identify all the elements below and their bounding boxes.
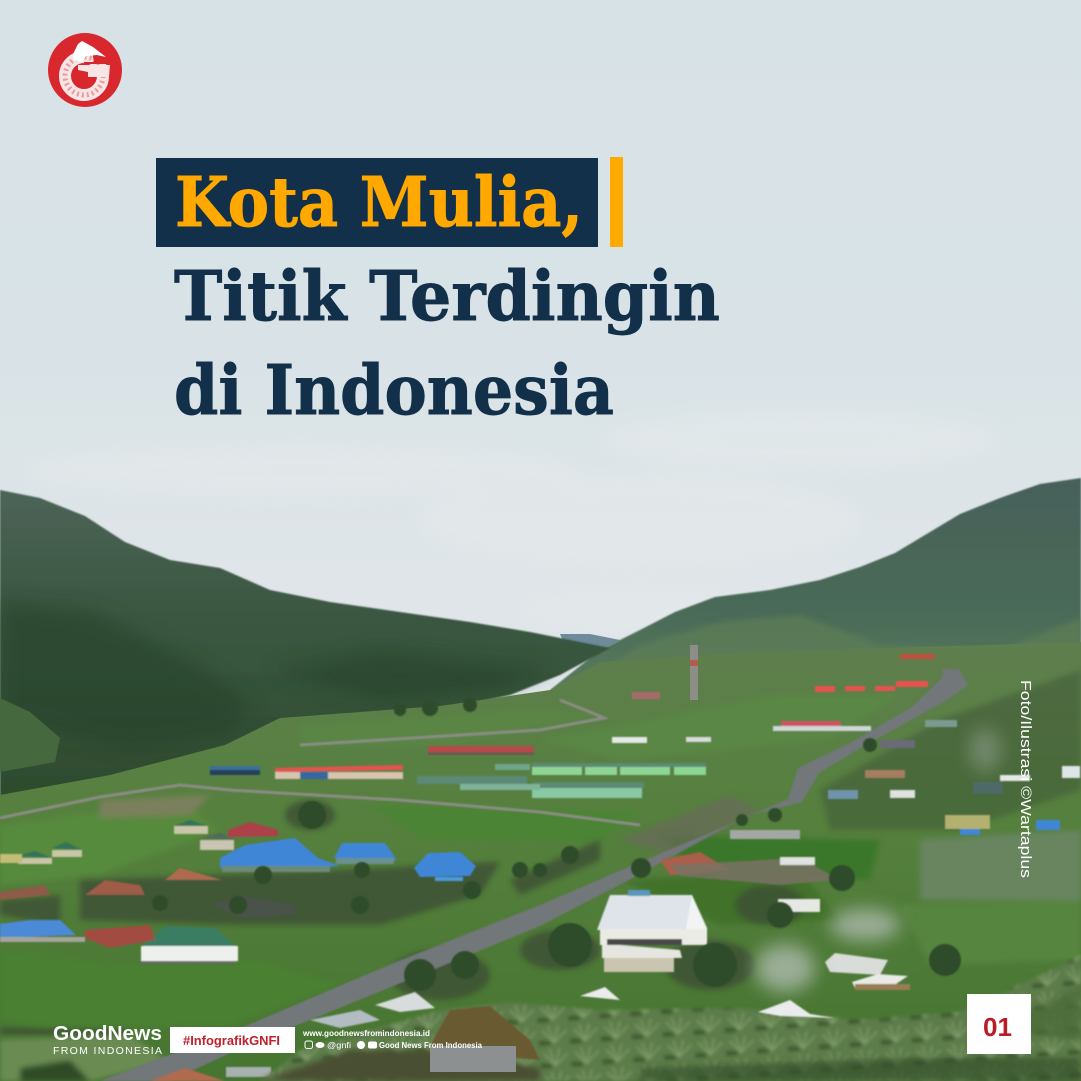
mountain shading: [0, 600, 550, 750]
white roof among shrubs: [758, 1000, 835, 1018]
icon: twitter: [316, 1042, 324, 1048]
side roads: [0, 700, 640, 825]
trees: [152, 698, 961, 991]
page number badge: [967, 994, 1031, 1054]
blue roofs: [220, 838, 340, 868]
haystack hut and fence: [430, 1006, 540, 1072]
logo: GNFI garuda emblem: [48, 33, 122, 107]
mountain: left: [0, 490, 610, 810]
hashtag badge: #InfografikGNFI: [183, 1033, 280, 1048]
title: [156, 157, 720, 431]
brown and red roofs: [228, 822, 278, 837]
church: [597, 895, 703, 930]
icon: facebook: [357, 1041, 365, 1049]
valley ground: [0, 642, 1081, 1081]
title accent bar: [610, 157, 623, 247]
green roof building: [141, 926, 238, 948]
footer: GoodNews brand: FROM INDONESIA: [53, 1045, 162, 1057]
social links: Good News From Indonesia: [379, 1041, 483, 1050]
main road: [100, 669, 968, 1081]
photo credit: Foto/Ilustrasi ©Wartaplus: [1017, 680, 1033, 878]
title line 1: Kota Mulia,: [175, 163, 583, 243]
social links: [302, 1029, 483, 1050]
clouds: [20, 410, 1000, 630]
page number badge: 01: [983, 1012, 1012, 1042]
foreground shrubs: [260, 955, 1081, 1081]
title highlight box: [156, 158, 598, 247]
radio tower: [690, 645, 698, 700]
icon: youtube: [368, 1042, 377, 1048]
red roofs: [275, 765, 403, 772]
town: dark vegetation and yards: [0, 670, 1081, 1000]
title line 3: di Indonesia: [174, 351, 614, 431]
sky: [0, 0, 1081, 720]
green houses: [495, 764, 706, 798]
smoke: [755, 728, 1001, 992]
footer: GoodNews brand: GoodNews: [53, 1023, 162, 1045]
footer: GoodNews brand: [53, 1023, 162, 1057]
social links: www.goodnewsfromindonesia.id: [302, 1029, 430, 1038]
distant ridge: [560, 634, 620, 650]
mountain: right: [550, 478, 1081, 700]
social links: @gnfi: [327, 1041, 351, 1050]
icon: instagram: [305, 1041, 312, 1048]
hashtag badge: [170, 1027, 295, 1053]
foreground shadow: [260, 985, 1081, 1081]
white houses: [778, 899, 820, 912]
fields: [0, 695, 1081, 1081]
title line 2: Titik Terdingin: [174, 257, 720, 337]
foothill left: [0, 698, 60, 772]
mountain: right lower slope: [560, 615, 1081, 700]
buildings: [0, 654, 1080, 1081]
